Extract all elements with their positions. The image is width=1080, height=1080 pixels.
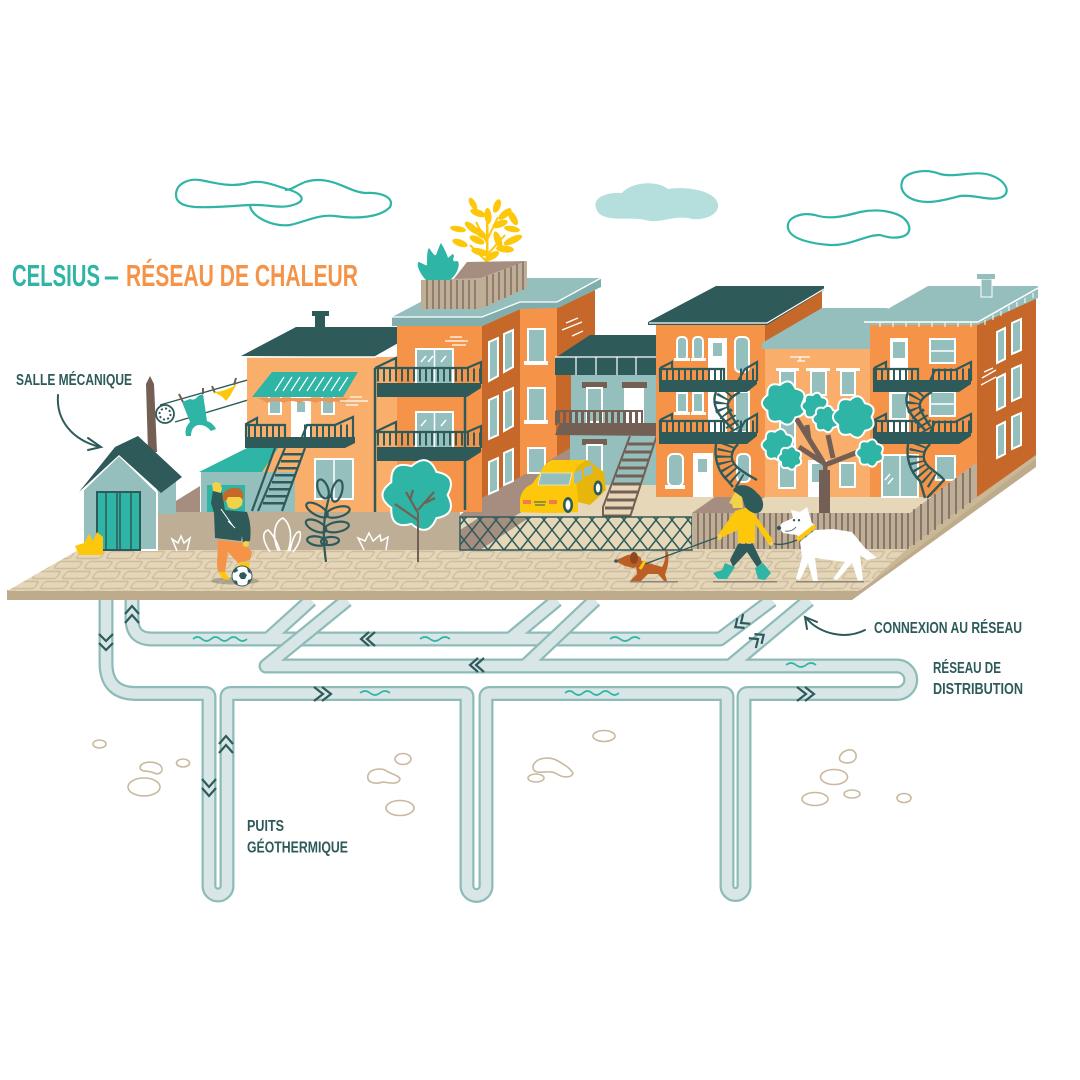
cloud outline: top left	[176, 180, 391, 225]
face	[729, 492, 743, 508]
middle peach building	[762, 308, 888, 497]
face	[225, 497, 243, 509]
side wall	[977, 293, 1036, 497]
head	[615, 554, 642, 568]
balconies	[873, 362, 971, 444]
bricks	[340, 397, 368, 405]
soccer ball	[232, 566, 252, 586]
sand courtyard	[510, 470, 930, 549]
title dash: –	[104, 258, 119, 293]
main pipe with geothermal wells	[106, 600, 880, 896]
building 1: peach	[199, 311, 398, 512]
white grass right	[358, 533, 388, 550]
openings	[665, 337, 750, 497]
white bush	[264, 518, 300, 552]
label: puits géothermique	[247, 818, 348, 856]
spiral stairs	[714, 392, 757, 487]
white dog	[777, 507, 877, 582]
building 2: orange	[375, 196, 601, 512]
plant: yellow crown	[75, 532, 103, 555]
shoes	[218, 562, 250, 580]
wall	[656, 323, 765, 497]
pegs	[179, 378, 236, 402]
shed roof	[79, 436, 182, 493]
roof	[555, 335, 660, 375]
distribution loop and its branches	[266, 600, 911, 694]
bricks	[445, 318, 583, 345]
collar	[640, 561, 645, 569]
branches	[395, 490, 435, 520]
wood fence	[692, 462, 977, 549]
building 4: right	[864, 274, 1038, 498]
collar	[797, 526, 815, 540]
cloud outline: right high	[901, 171, 1007, 202]
sweater and arm	[211, 490, 251, 542]
balconies	[375, 358, 481, 512]
knee hand	[243, 541, 249, 547]
lintels and openings	[582, 382, 647, 473]
front windows	[416, 349, 453, 448]
door and windows	[269, 395, 353, 499]
spiral stairs	[906, 392, 944, 498]
pants	[217, 540, 252, 572]
shed door	[97, 492, 140, 550]
shadow	[796, 581, 864, 582]
rocks	[93, 730, 911, 816]
boy with ball	[211, 482, 259, 586]
title	[12, 258, 358, 293]
awning	[252, 372, 358, 403]
teal shed annex	[199, 448, 295, 512]
eave	[241, 344, 398, 357]
hand	[212, 482, 222, 493]
eyes	[793, 519, 800, 521]
teal shirt	[182, 394, 216, 436]
small dog	[614, 550, 678, 582]
rooftop yellow tree	[450, 196, 524, 278]
back yards	[158, 437, 930, 550]
chimney pole	[146, 376, 157, 452]
side windows	[489, 330, 513, 494]
leashes	[645, 537, 797, 564]
white grass left	[172, 536, 190, 551]
wall	[765, 346, 870, 497]
body	[630, 550, 668, 581]
eave	[649, 289, 824, 323]
lower windows	[779, 460, 855, 497]
flat roof	[392, 278, 601, 326]
brown balcony	[555, 411, 660, 436]
pulley	[156, 405, 174, 423]
rooftop planter	[421, 261, 527, 309]
trunk	[417, 513, 419, 562]
tree: centre right	[762, 381, 883, 513]
yellow underwear	[213, 384, 237, 401]
line	[160, 373, 272, 422]
title part: Celsius: CELSIUS	[12, 258, 100, 293]
cloud filled: centre	[595, 183, 718, 221]
shadow	[211, 578, 259, 584]
tan wall	[158, 512, 460, 550]
eave ticks	[880, 293, 1033, 327]
label: réseau de distribution: DISTRIBUTION	[933, 681, 1023, 698]
front openings	[882, 338, 955, 497]
side windows	[997, 319, 1021, 458]
woman walking	[713, 485, 777, 582]
label: puits géothermique: PUITS	[247, 818, 284, 835]
cloud outline: right low	[788, 211, 909, 245]
return pipe and its branches	[132, 600, 772, 639]
cobbled pavement	[7, 455, 1036, 591]
dark leaf plant	[304, 478, 351, 562]
roof	[241, 327, 398, 357]
wall	[247, 357, 397, 512]
ear	[630, 552, 638, 564]
wall	[570, 375, 660, 485]
front wall	[870, 325, 977, 497]
mouth	[785, 527, 796, 531]
tree: small teal	[382, 460, 451, 562]
side	[765, 290, 822, 345]
shed door planks	[106, 492, 131, 550]
stairs	[252, 448, 305, 511]
chimney	[977, 274, 995, 297]
middle wall	[520, 308, 557, 477]
plants	[172, 478, 388, 562]
clouds	[176, 171, 1007, 245]
nose	[614, 559, 618, 563]
label: salle mécanique: SALLE MÉCANIQUE	[16, 370, 132, 389]
bricks	[981, 368, 996, 385]
mechanical room shed	[75, 376, 182, 555]
hands	[717, 534, 774, 546]
building 3: orange with balconies	[648, 286, 824, 497]
label: réseau de distribution: RÉSEAU DE	[933, 658, 1001, 677]
front wall	[397, 325, 482, 512]
sweater	[718, 508, 773, 543]
trunk	[796, 418, 858, 513]
clothesline	[156, 373, 272, 436]
rooftop teal plant	[418, 243, 459, 280]
balcony	[245, 417, 355, 448]
title part: réseau de chaleur: RÉSEAU DE CHALEUR	[126, 258, 358, 293]
side wall 2	[557, 290, 595, 456]
roof band	[555, 357, 660, 375]
mauve ground left	[158, 486, 200, 512]
middle building: blue grey	[555, 335, 660, 485]
nose	[777, 526, 781, 530]
sweater stripes	[221, 509, 235, 528]
mauve ground right	[692, 462, 765, 513]
middle windows	[524, 329, 548, 473]
upper windows	[776, 368, 860, 463]
mauve driveway	[460, 437, 605, 517]
foliage	[762, 381, 883, 470]
lattice fence	[460, 517, 692, 550]
hair	[223, 488, 243, 501]
shadow	[713, 581, 777, 582]
yellow car	[520, 460, 606, 513]
shadow	[630, 581, 678, 582]
label: réseau de distribution	[933, 658, 1023, 698]
arrow: connexion au réseau	[805, 617, 865, 635]
head	[779, 507, 815, 540]
boots	[713, 563, 771, 580]
flow arrows	[99, 606, 814, 796]
label: connexion au réseau: CONNEXION AU RÉSEAU	[874, 618, 1022, 637]
balconies	[659, 362, 757, 444]
trousers	[730, 544, 762, 567]
slab edge	[7, 457, 1036, 600]
label: puits géothermique: GÉOTHERMIQUE	[247, 838, 348, 856]
ground slab	[7, 455, 1036, 600]
eave	[864, 288, 1038, 322]
underground pipes	[99, 600, 911, 896]
arrow: salle mécanique	[58, 395, 101, 450]
shed side wall	[157, 478, 176, 514]
chimney	[312, 311, 329, 333]
tan side strip	[862, 455, 1036, 590]
side wall 1	[482, 309, 520, 498]
shed front	[83, 455, 157, 550]
mauve ground centre-left	[353, 482, 397, 512]
brown stairs	[603, 435, 657, 523]
side orange	[556, 375, 571, 435]
roof	[865, 286, 1038, 325]
bricks	[790, 357, 810, 361]
body	[796, 529, 877, 581]
water waves	[193, 637, 816, 695]
hair	[733, 485, 763, 513]
roof	[762, 308, 888, 349]
roof	[648, 286, 824, 325]
